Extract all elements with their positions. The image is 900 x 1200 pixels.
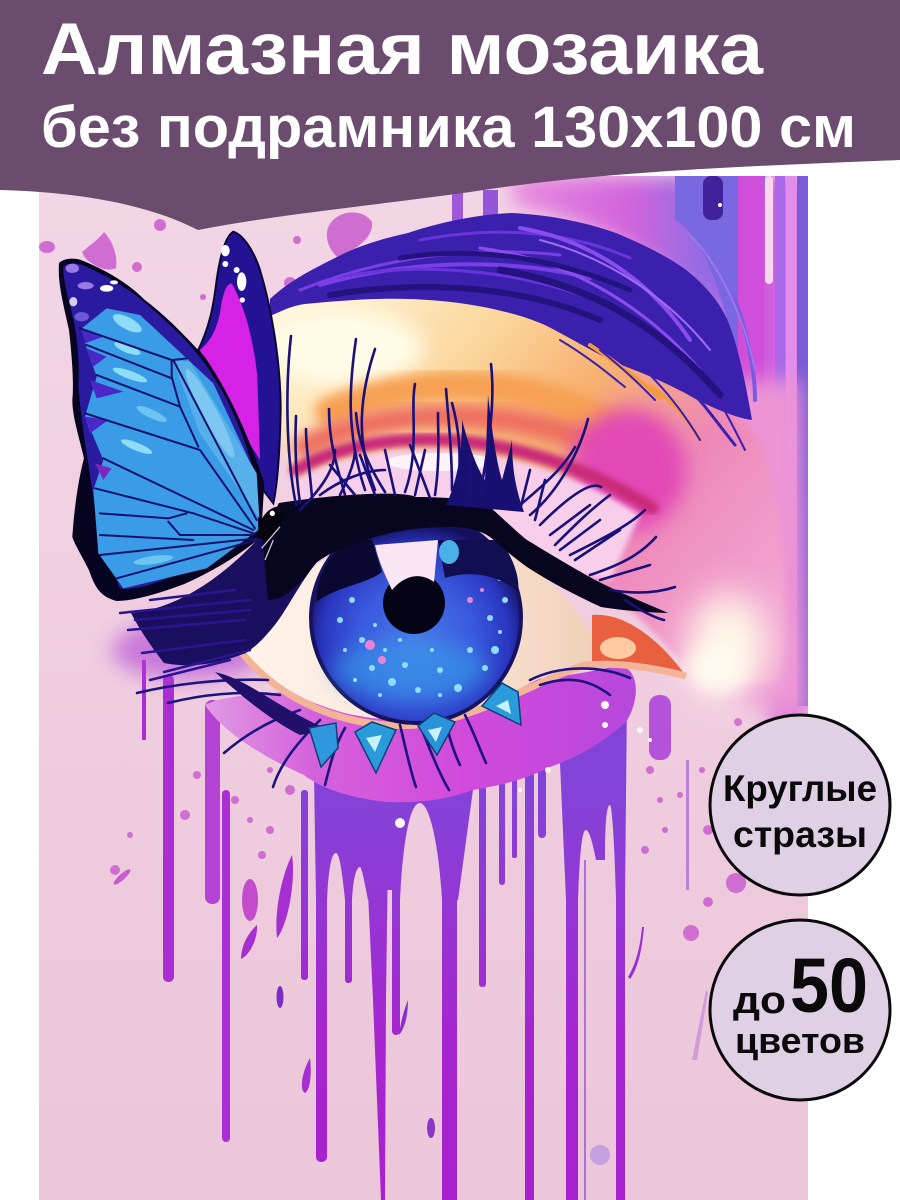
iris reflection — [375, 540, 438, 590]
left dark lash mass — [131, 538, 316, 666]
violet pool right of iris — [560, 720, 627, 900]
badge: up to 50 colours: до — [733, 980, 786, 1022]
left purple paint drips — [142, 660, 230, 1142]
right pink wash — [678, 368, 808, 717]
white paint specks — [395, 203, 722, 828]
header banner — [0, 0, 900, 230]
pale inner lid — [296, 449, 640, 580]
butterfly wing indigo base — [63, 263, 257, 589]
gem 4 — [482, 683, 521, 725]
left outer lashes — [120, 590, 250, 680]
iris dark right reflection — [438, 540, 518, 592]
paint splashes — [39, 212, 746, 1165]
iris — [311, 513, 521, 723]
salmon eyelid band — [305, 416, 615, 452]
badge: up to 50 colours: цветов — [735, 1020, 865, 1061]
eyebrow — [270, 213, 755, 450]
butterfly rear wing spots — [221, 245, 246, 303]
badge: up to 50 colours: 50 — [790, 943, 868, 1029]
small side drips and strokes — [399, 695, 708, 1060]
magenta under-eye stain — [205, 665, 636, 802]
gem highlights — [366, 700, 511, 752]
butterfly wing pale spots — [66, 264, 94, 321]
upper lash mass — [262, 494, 668, 613]
cream highlight near eye corner — [688, 593, 768, 697]
title line 1: Алмазная мозаика — [41, 9, 765, 90]
central lash cluster — [446, 395, 524, 512]
eye corner caruncle — [592, 615, 686, 676]
artwork: eye with butterfly — [39, 176, 808, 1200]
crystal gems — [309, 683, 521, 773]
second cream highlight — [685, 644, 745, 696]
iris small sparkle patch — [439, 540, 459, 564]
butterfly discal cell — [173, 361, 259, 518]
butterfly white spots — [100, 280, 118, 292]
butterfly — [60, 232, 284, 600]
orange eyelid band — [330, 386, 610, 425]
badge: round rhinestones — [710, 715, 890, 895]
butterfly wing highlights — [110, 311, 240, 567]
lower lash shadow — [215, 672, 330, 735]
butterfly body — [258, 507, 284, 560]
butterfly blue base — [82, 308, 258, 588]
butterfly wing veins — [80, 328, 257, 578]
artwork background — [39, 176, 808, 1200]
paint drops — [112, 855, 435, 1138]
gem 1 — [309, 723, 338, 767]
butterfly rear wing — [197, 232, 281, 503]
gem 3 — [418, 713, 455, 755]
butterfly front wing — [60, 260, 263, 600]
title line 2: без подрамника 130х100 см — [41, 95, 856, 160]
white lid highlight — [385, 453, 495, 471]
lower lid rim — [242, 653, 686, 726]
gem 2 — [355, 722, 396, 773]
iris dark left reflection — [316, 539, 382, 602]
crimson eyelid crease — [296, 440, 652, 508]
badge: round rhinestones: стразы — [733, 814, 867, 855]
purple paint drips — [301, 769, 625, 1200]
upper eyelashes — [287, 336, 675, 620]
top right paint wash — [452, 176, 808, 730]
badge: round rhinestones: Круглые — [723, 768, 877, 809]
magenta wash on eyelid — [570, 408, 686, 532]
eyelid skin — [270, 294, 785, 684]
pale highlight on brow bone — [267, 310, 423, 386]
butterfly purple accents — [82, 328, 123, 480]
lower eyelashes — [137, 668, 630, 790]
left lash haze — [112, 620, 268, 680]
badge: up to 50 colours — [710, 920, 890, 1100]
butterfly rear wing magenta stripe — [200, 283, 260, 460]
eye white — [246, 552, 592, 719]
violet paint pool — [314, 775, 475, 900]
